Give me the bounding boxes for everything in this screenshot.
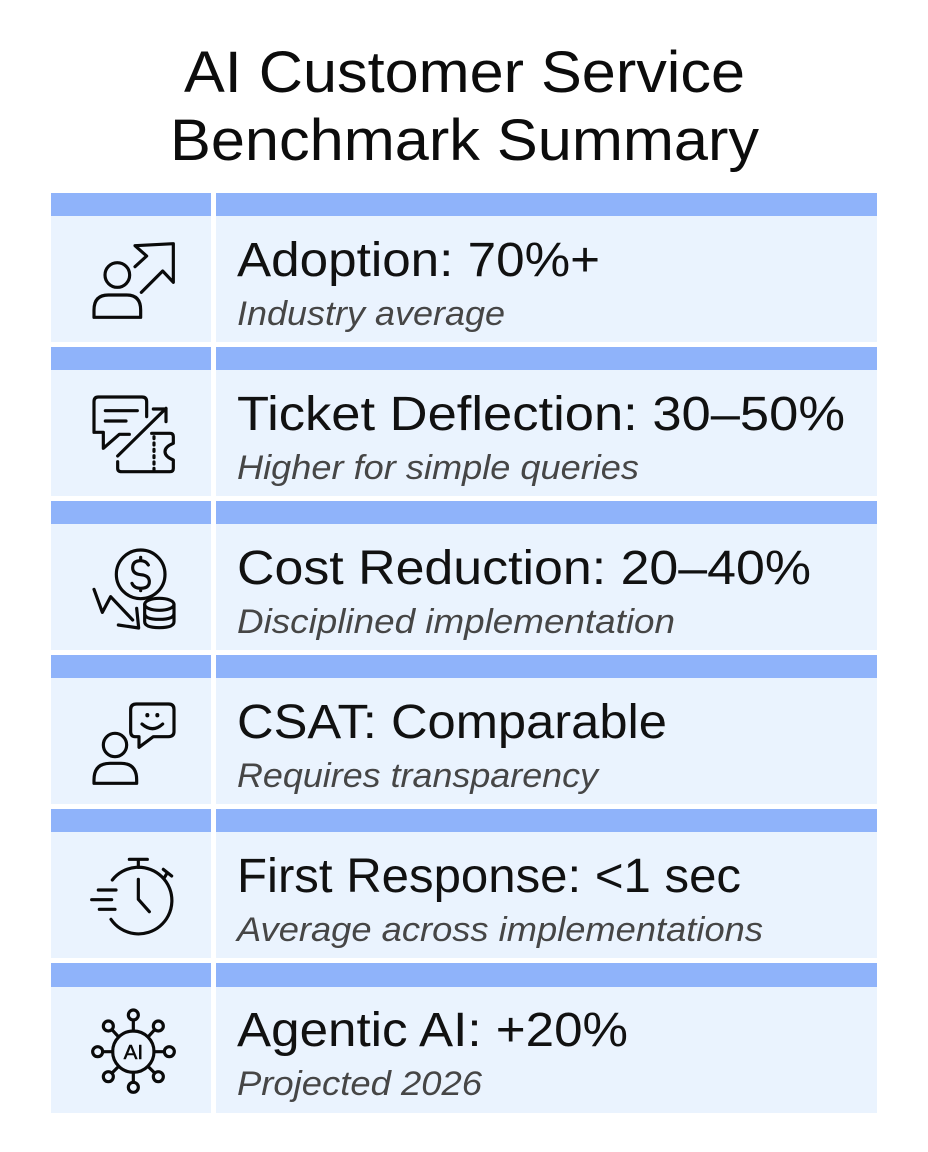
heading: csat: CSAT: Comparable xyxy=(237,696,667,749)
subtext: ticket deflection: Higher for simple queries xyxy=(237,449,639,487)
panel: cost reduction row xyxy=(51,501,877,650)
icon: AI hub with nodes: AI xyxy=(124,1041,143,1064)
panel: agentic ai row xyxy=(51,963,877,1113)
panel: csat row xyxy=(51,655,877,804)
subtext: adoption: Industry average xyxy=(237,295,505,333)
title: Benchmark Summary xyxy=(170,108,759,173)
heading: first response: First Response: <1 sec xyxy=(237,850,741,903)
icon: coin, falling arrow and stack xyxy=(94,550,174,628)
subtext: first response: Average across implementations xyxy=(235,911,763,949)
icon: person with smiling speech bubble xyxy=(94,704,174,783)
heading: cost reduction: Cost Reduction: 20–40% xyxy=(237,542,811,595)
heading: agentic ai: Agentic AI: +20% xyxy=(237,1004,628,1057)
subtext: cost reduction: Disciplined implementation xyxy=(237,603,675,641)
heading: ticket deflection: Ticket Deflection: 30–50% xyxy=(237,388,845,441)
panel: first response row xyxy=(51,809,877,958)
icon: AI hub with nodes xyxy=(93,1010,174,1092)
title: AI Customer Service xyxy=(184,40,745,105)
title xyxy=(170,40,759,173)
icon: stopwatch with speed lines xyxy=(92,859,172,934)
panel: ticket deflection row xyxy=(51,347,877,496)
icon: chat bubble and ticket xyxy=(94,397,173,472)
subtext: agentic ai: Projected 2026 xyxy=(237,1065,482,1103)
heading: adoption: Adoption: 70%+ xyxy=(237,234,600,287)
panel: adoption row xyxy=(51,193,877,342)
icon: person with upward arrow xyxy=(94,244,173,317)
subtext: csat: Requires transparency xyxy=(237,757,600,795)
